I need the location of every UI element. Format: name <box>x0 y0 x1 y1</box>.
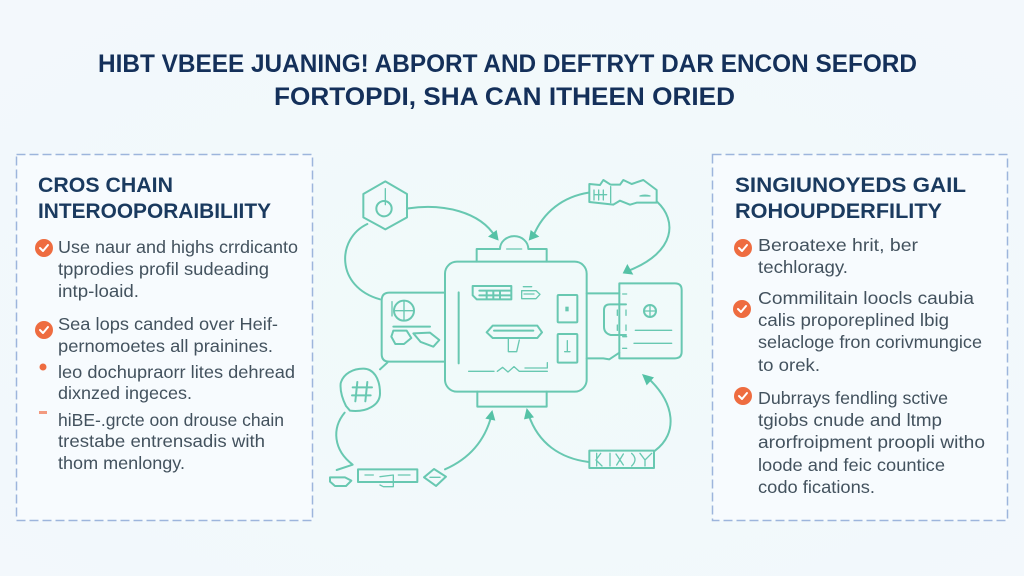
bullet 2: pernomoetes all prainines. <box>58 336 273 356</box>
bullet 1: techloragy. <box>758 257 848 277</box>
bullet 2: selacloge fron corivmungice <box>758 332 982 352</box>
arrow: building to document <box>623 202 669 275</box>
hexagon power icon <box>363 181 407 229</box>
bullet 2 <box>733 288 982 375</box>
panel heading: SINGIUNOYEDS GAIL <box>735 174 966 197</box>
panel frame <box>16 154 312 520</box>
bullet 3: arorfroipment proopli witho <box>758 432 985 452</box>
bullet 4 <box>39 410 284 473</box>
bullet 1 <box>35 237 298 301</box>
bullet 4: hiBE-.grcte oon drouse chain <box>58 410 284 430</box>
bullet 3 <box>40 362 295 403</box>
arrow: server to device <box>445 410 495 469</box>
panel: single unoyeds gail <box>712 154 1008 520</box>
bullet 2: Sea lops canded over Heif- <box>58 314 278 334</box>
connector: bubble to left module <box>380 363 387 369</box>
right document module <box>587 283 682 359</box>
left module <box>382 293 445 362</box>
top right building icon <box>589 180 657 205</box>
arrow: chip to document <box>642 374 671 451</box>
bullet 1: Use naur and highs crrdicanto <box>58 237 298 257</box>
connector: bubble to server <box>336 413 353 470</box>
bottom left server icon <box>330 469 446 487</box>
bullet 3 <box>734 387 985 497</box>
bottom right chip icon <box>589 451 654 468</box>
central device <box>445 236 587 407</box>
panel heading: CROS CHAIN <box>38 174 173 197</box>
bullet 2: calis proporeplined lbig <box>758 310 949 330</box>
bullet 2: to orek. <box>758 355 820 375</box>
bullet 1: Beroatexe hrit, ber <box>758 235 918 255</box>
bullet 3: leo dochupraorr lites dehread <box>58 362 295 382</box>
bullet 1: tpprodies profil sudeading <box>58 259 269 279</box>
bullet 3: codo fications. <box>758 477 875 497</box>
bullet 3: tgiobs cnude and ltmp <box>758 410 942 430</box>
panel heading <box>38 174 271 223</box>
panel heading: INTEROOPORAIBILIITY <box>38 200 271 223</box>
bullet 4: thom menlongy. <box>58 453 185 473</box>
central diagram <box>330 180 682 487</box>
bullet 3: dixnzed ingeces. <box>58 383 192 403</box>
panel heading <box>735 174 966 223</box>
bullet 2 <box>35 314 278 356</box>
bullet 3: loode and feic countice <box>758 455 945 475</box>
connector: hexagon to left module <box>345 224 380 299</box>
arrow: hexagon to device <box>408 207 499 241</box>
bullet 1 <box>734 235 918 277</box>
title <box>98 50 917 111</box>
title: HIBT VBEEE JUANING! ABPORT AND DEFTRYT DAR ENCON SEFORD <box>98 50 917 78</box>
panel frame <box>712 154 1008 520</box>
arrow: building to device <box>529 193 589 241</box>
hash speech bubble <box>341 369 380 411</box>
arrow: chip to device <box>524 408 589 462</box>
title: FORTOPDI, SHA CAN ITHEEN ORIED <box>274 83 735 111</box>
bullet 1: intp-loaid. <box>58 281 139 301</box>
bullet 3: Dubrrays fendling sctive <box>758 388 948 408</box>
panel: cross chain interoperability <box>16 154 312 520</box>
panel heading: ROHOUPDERFILITY <box>735 200 942 223</box>
bullet 4: trestabe entrensadis with <box>58 431 265 451</box>
bullet 2: Commilitain loocls caubia <box>758 288 974 308</box>
